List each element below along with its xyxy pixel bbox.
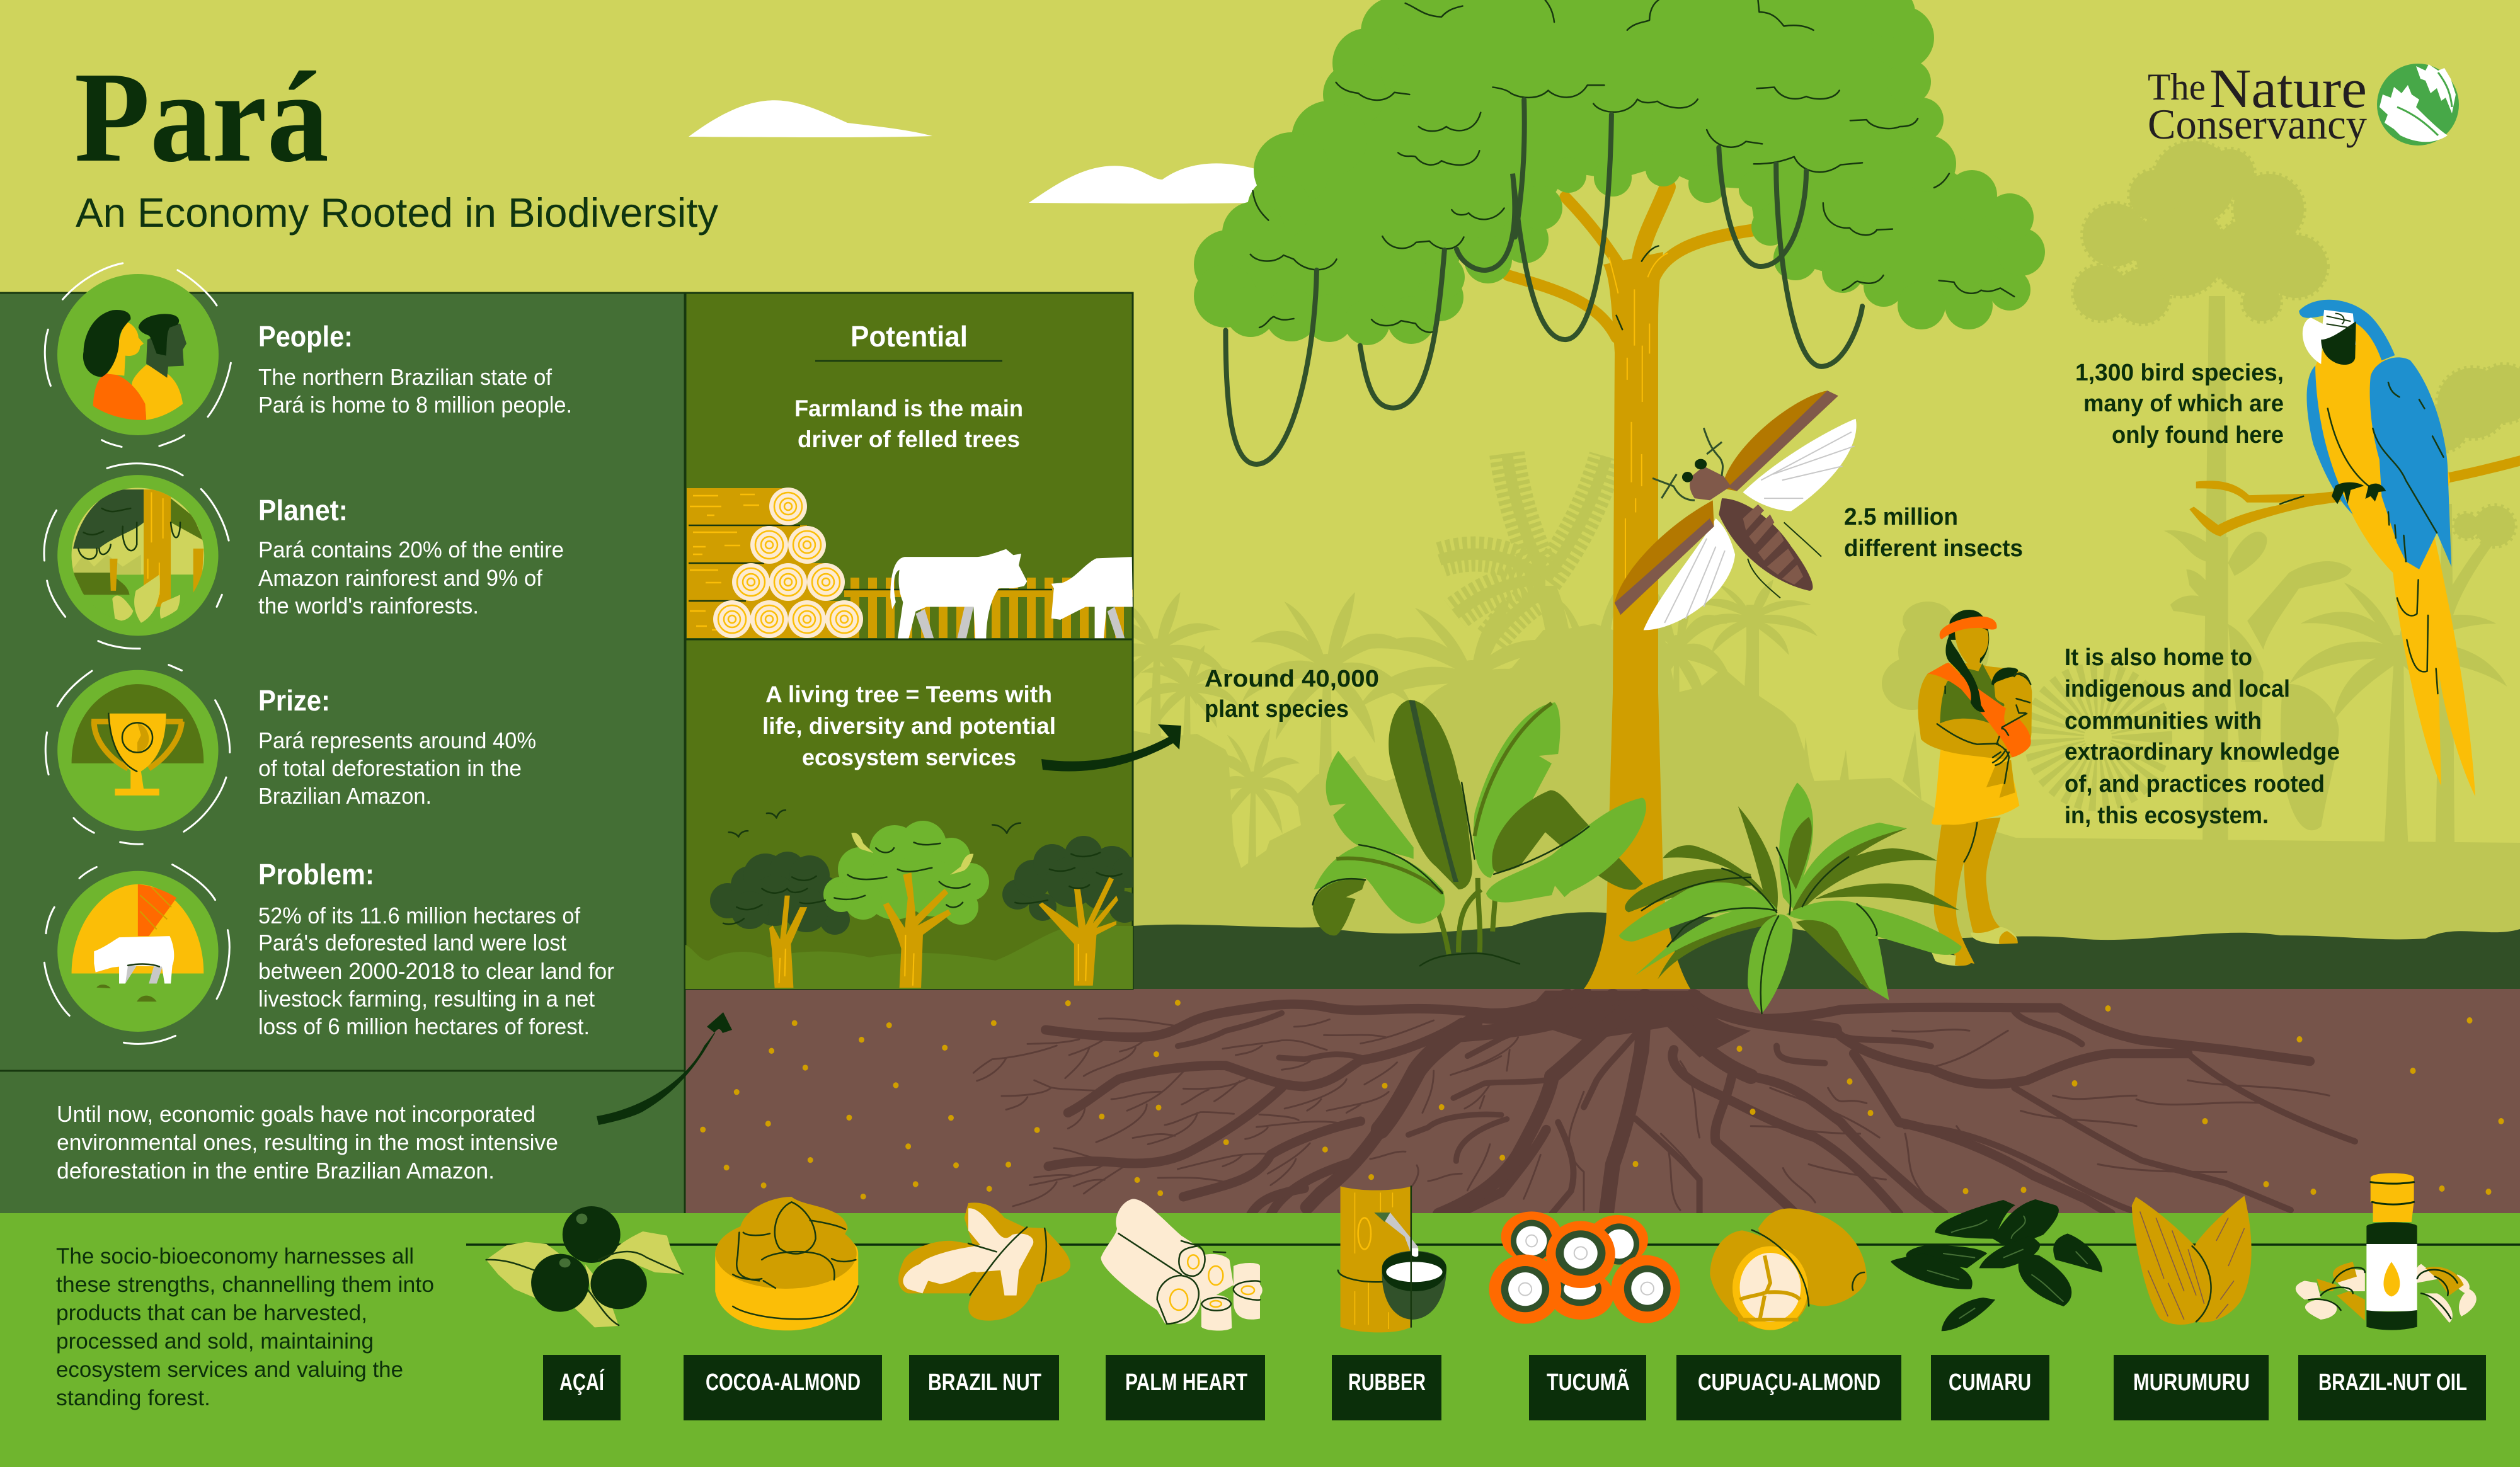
label: tucuma: TUCUMÃ — [1547, 1368, 1630, 1396]
main tree — [1194, 0, 2045, 989]
label: brazil-nut oil — [2298, 1355, 2486, 1420]
label: palm heart: PALM HEART — [1125, 1369, 1247, 1396]
text: socio-bioeconomy — [56, 1244, 434, 1410]
text: problem: loss of 6 million hectares of forest. — [258, 1013, 590, 1039]
birds — [729, 810, 1021, 837]
child — [2004, 702, 2028, 725]
bushes — [685, 926, 1133, 989]
text: socio-bioeconomy: The socio-bioeconomy harnesses all — [56, 1244, 414, 1269]
text: problem: livestock farming, resulting in a net — [258, 986, 595, 1012]
icon: globe leaf — [2377, 64, 2459, 146]
label: murumuru — [2114, 1355, 2269, 1420]
text: people — [258, 320, 572, 418]
text: farmland — [794, 396, 1023, 452]
arrow: to potential — [597, 1012, 732, 1125]
text: people: People: — [258, 320, 353, 353]
branch — [2189, 455, 2520, 537]
text: farmland: Farmland is the main — [794, 396, 1023, 421]
text: prize: of total deforestation in the — [258, 755, 522, 781]
label: palm heart — [1106, 1355, 1265, 1420]
text: socio-bioeconomy: products that can be harvested, — [56, 1301, 367, 1325]
centre and right roots — [1462, 991, 2355, 1214]
plant: banana — [1313, 700, 1646, 966]
product shelf line — [466, 1243, 2520, 1246]
label: cumaru — [1931, 1355, 2049, 1420]
text: insects: different insects — [1844, 535, 2023, 562]
text: socio-bioeconomy: standing forest. — [56, 1386, 210, 1410]
figure: indigenous woman with child — [1918, 610, 2032, 966]
text: plants — [1205, 666, 1379, 722]
ground strip — [1133, 912, 2520, 992]
legs — [1934, 818, 2003, 964]
feather palm — [1440, 454, 1606, 819]
label: murumuru: MURUMURU — [2133, 1369, 2250, 1396]
text: socio-bioeconomy: these strengths, channelling them into — [56, 1272, 434, 1297]
text: people: Pará is home to 8 million people. — [258, 392, 572, 418]
logs — [687, 488, 858, 638]
panel trees scene — [685, 810, 1143, 989]
macaw wing — [2370, 357, 2451, 569]
macaw tail — [2393, 528, 2475, 796]
text: living tree: life, diversity and potential — [762, 713, 1056, 739]
label: rubber: RUBBER — [1348, 1369, 1426, 1396]
label: rubber — [1332, 1355, 1441, 1420]
text: birds: only found here — [2112, 422, 2284, 448]
logo: The Nature Conservancy: Conservancy — [2148, 100, 2367, 148]
tree roots — [700, 991, 2355, 1214]
soil seed dots — [1633, 1005, 2504, 1195]
text: communities: It is also home to — [2065, 644, 2252, 671]
cloud left — [689, 100, 932, 137]
product: cocoa-almond — [715, 1197, 858, 1330]
text: farmland: driver of felled trees — [798, 426, 1020, 452]
text: prize: Brazilian Amazon. — [258, 783, 432, 809]
text: plants: Around 40,000 — [1205, 666, 1379, 692]
logo: The Nature Conservancy — [2148, 59, 2459, 148]
logo: The Nature Conservancy: Nature — [2209, 59, 2367, 120]
text: prize: Pará represents around 40% — [258, 728, 536, 753]
hair back — [1949, 610, 1989, 663]
text: communities — [2065, 644, 2340, 829]
skirt — [1932, 750, 2019, 825]
macaw face and beak — [2320, 310, 2356, 348]
label: acai — [543, 1355, 621, 1420]
icon: beetle — [1615, 391, 1857, 630]
background forest silhouettes — [1086, 141, 2520, 945]
text: until now: Until now, economic goals have not incorporated — [57, 1101, 536, 1127]
subtitle: An Economy Rooted in Biodiversity — [76, 190, 718, 236]
icon: farm logs and cows — [685, 488, 1133, 639]
label: cupuacu-almond: CUPUAÇU-ALMOND — [1698, 1369, 1881, 1396]
label: brazil-nut oil: BRAZIL-NUT OIL — [2318, 1369, 2467, 1396]
icon: people — [45, 263, 231, 447]
label: brazil nut: BRAZIL NUT — [928, 1369, 1041, 1396]
text: planet — [258, 494, 564, 619]
cows — [890, 549, 1133, 639]
text: planet: Pará contains 20% of the entire — [258, 537, 564, 562]
text: communities: in, this ecosystem. — [2065, 802, 2269, 829]
trees — [710, 836, 1143, 935]
text: problem: Pará's deforested land were lost — [258, 930, 566, 956]
heading: potential: Potential — [850, 320, 968, 353]
text: until now: deforestation in the entire Brazilian Amazon. — [57, 1158, 495, 1184]
text: communities: communities with — [2065, 708, 2262, 734]
branch with macaw — [2189, 300, 2520, 796]
icon: problem cow — [44, 865, 229, 1044]
text: communities: of, and practices rooted — [2065, 771, 2325, 797]
text: living tree — [762, 682, 1056, 770]
left roots — [700, 993, 1567, 1214]
text: planet: Amazon rainforest and 9% of — [258, 565, 543, 591]
text: problem — [258, 858, 614, 1039]
vines — [1225, 100, 1862, 464]
text: plants: plant species — [1205, 696, 1349, 722]
soil — [685, 989, 2520, 1213]
macaw body — [2313, 308, 2450, 574]
text: communities: extraordinary knowledge — [2065, 739, 2340, 765]
text: birds: many of which are — [2083, 391, 2284, 417]
macaw talons — [2332, 482, 2386, 504]
macaw feather lines — [2280, 382, 2444, 694]
label: brazil nut — [909, 1355, 1059, 1420]
text: birds: 1,300 bird species, — [2075, 360, 2284, 386]
bottom band — [0, 1213, 2520, 1467]
text: prize: Prize: — [258, 684, 330, 717]
text: problem: Problem: — [258, 858, 374, 891]
panel: left column — [0, 293, 685, 1213]
torso — [1918, 663, 2032, 760]
label: cocoa-almond — [684, 1355, 882, 1420]
bushy palm and understory — [1802, 602, 2142, 819]
text: planet: the world's rainforests. — [258, 593, 479, 619]
text: problem: 52% of its 11.6 million hectares of — [258, 903, 581, 928]
cloud right — [1029, 163, 1260, 203]
right background tree — [2422, 365, 2520, 844]
product: cumaru — [1891, 1199, 2102, 1331]
product: cupuacu-almond — [1710, 1208, 1867, 1330]
text: people: The northern Brazilian state of — [258, 364, 553, 390]
text: living tree: ecosystem services — [802, 745, 1016, 770]
text: prize — [258, 684, 536, 809]
product: murumuru — [2132, 1196, 2252, 1325]
text: until now: environmental ones, resulting in the most intensive — [57, 1129, 558, 1155]
plant: agave — [1619, 782, 1962, 1013]
label: cocoa-almond: COCOA-ALMOND — [706, 1369, 861, 1396]
fence — [844, 578, 1133, 638]
product: rubber — [1338, 1186, 1446, 1332]
tree trunk and branches — [1508, 187, 1761, 989]
text: communities: indigenous and local — [2065, 676, 2290, 702]
banana silhouette — [2164, 530, 2352, 846]
text: living tree: A living tree = Teems with — [765, 682, 1052, 707]
headband — [1940, 617, 1997, 639]
text: socio-bioeconomy: ecosystem services and valuing the — [56, 1357, 403, 1382]
canopy outlines and hanging vines — [1225, 0, 2014, 464]
tree canopy — [1194, 0, 2045, 345]
text: insects — [1844, 504, 2023, 562]
label: cumaru: CUMARU — [1949, 1369, 2031, 1396]
text: until now — [57, 1101, 558, 1184]
tall background tree — [2073, 141, 2327, 844]
sling — [1927, 663, 2031, 757]
label: acai: AÇAÍ — [559, 1368, 605, 1396]
icon: prize trophy — [45, 665, 230, 844]
crop top — [1940, 663, 2005, 724]
logo: The Nature Conservancy: The — [2148, 66, 2206, 108]
panel: potential — [685, 293, 1133, 989]
arrow: to plants — [1041, 724, 1181, 772]
pale clearing — [1228, 756, 1301, 868]
text: socio-bioeconomy: processed and sold, maintaining — [56, 1329, 374, 1354]
text: problem: between 2000-2018 to clear land for — [258, 958, 614, 984]
label: cupuacu-almond — [1676, 1355, 1901, 1420]
text: planet: Planet: — [258, 494, 348, 527]
icon: planet — [44, 464, 229, 649]
product: acai — [486, 1206, 683, 1327]
palms — [1086, 592, 1227, 800]
face — [1955, 626, 1988, 671]
text: insects: 2.5 million — [1844, 504, 1958, 530]
product: brazil-nut oil — [2296, 1173, 2477, 1330]
product: palm heart — [1101, 1199, 1263, 1331]
text: birds — [2075, 360, 2284, 448]
product: brazil nut — [898, 1202, 1070, 1321]
title: Pará — [74, 45, 329, 189]
product: tucuma — [1489, 1211, 1680, 1324]
braid — [1945, 636, 1985, 712]
label: tucuma — [1529, 1355, 1646, 1420]
